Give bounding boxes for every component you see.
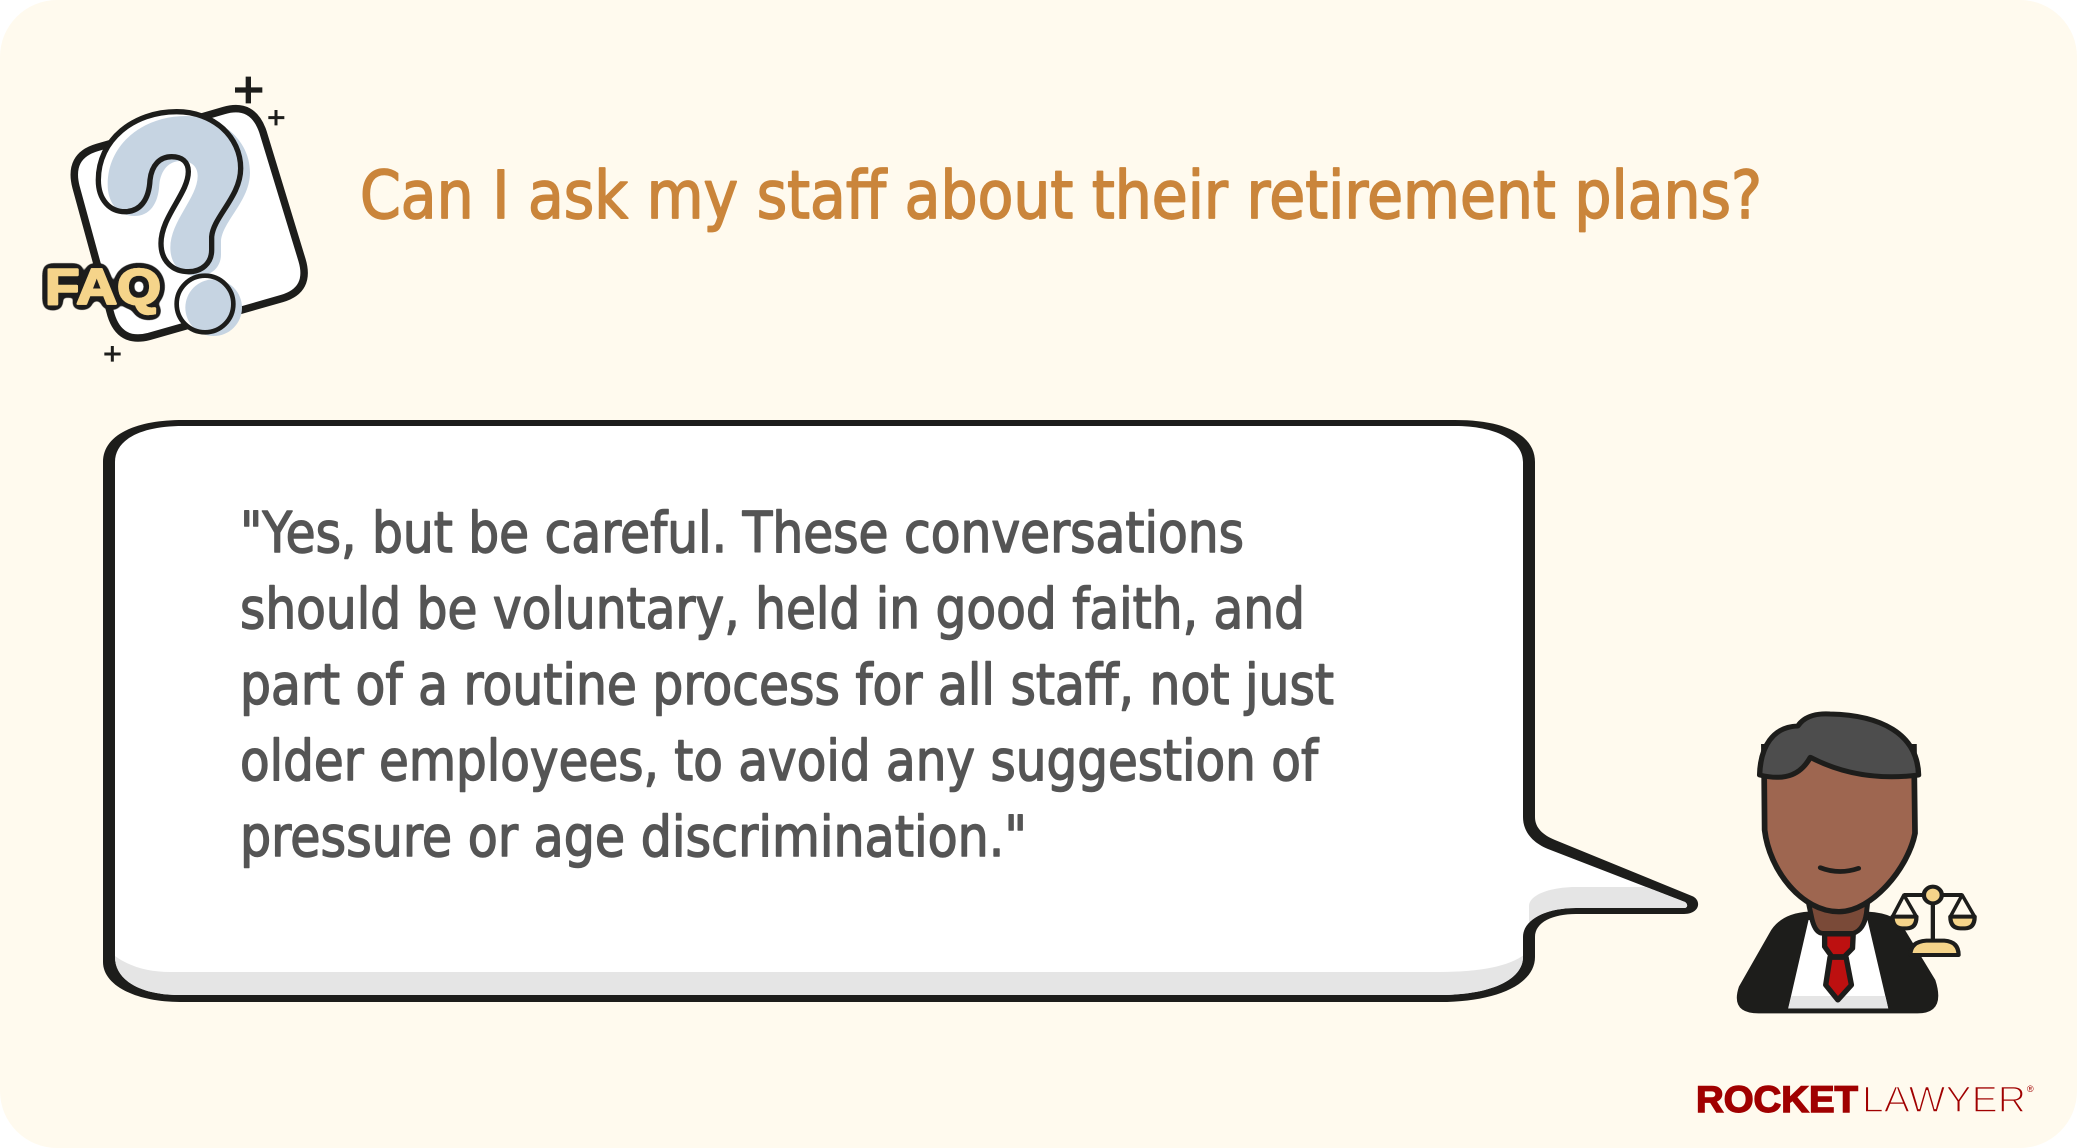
logo: Rocket Lawyer: ® (2027, 1084, 2034, 1094)
quote text: part of a routine process for all staff, not just (240, 653, 1334, 718)
quote text: pressure or age discrimination." (240, 805, 1027, 870)
card (74, 109, 304, 338)
jacket (1737, 912, 1938, 1013)
logo: Rocket Lawyer: ROCKET (1696, 1079, 1858, 1120)
icon: FAQ question mark (45, 77, 304, 362)
icon: lawyer with scales (1737, 714, 1975, 1013)
neck (1809, 903, 1867, 933)
scales (1892, 887, 1975, 955)
tie (1825, 934, 1853, 1000)
face (1764, 747, 1915, 912)
logo: Rocket Lawyer: LAWYER (1862, 1079, 2026, 1120)
title: Can I ask my staff about their retirement plans? (360, 157, 1762, 234)
quote text (240, 501, 1334, 870)
hair (1760, 714, 1919, 777)
mouth (1820, 868, 1859, 872)
quote text: "Yes, but be careful. These conversations (240, 501, 1244, 566)
shirt (1788, 920, 1888, 1008)
FAQ label: FAQ (45, 259, 161, 315)
logo: Rocket Lawyer (1696, 1079, 2034, 1120)
quote text: older employees, to avoid any suggestion of (240, 729, 1319, 794)
quote text: should be voluntary, held in good faith, and (240, 577, 1305, 642)
question mark (98, 77, 284, 362)
speech bubble (103, 420, 1700, 1005)
